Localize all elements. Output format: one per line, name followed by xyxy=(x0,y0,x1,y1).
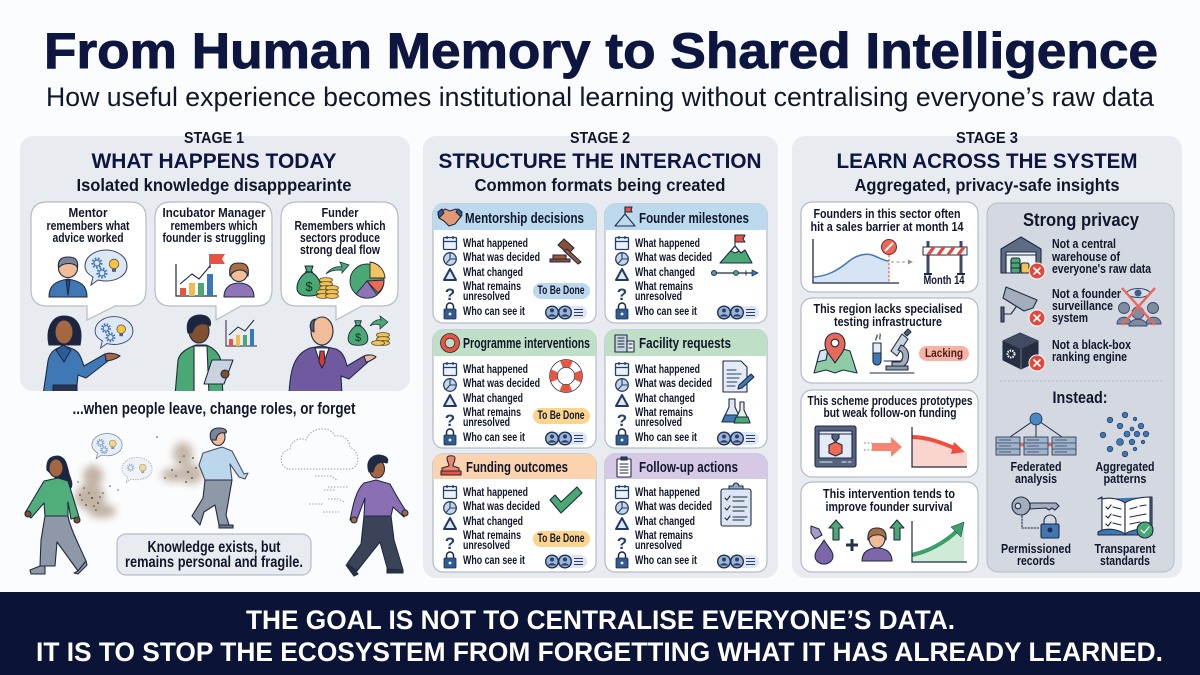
stage 1 subheading: Isolated knowledge disapppearinte xyxy=(76,175,352,195)
card: facility requests: Who can see it xyxy=(635,432,697,444)
card: programme interventions: What was decided xyxy=(463,378,540,390)
stage 3 label: STAGE 3 xyxy=(956,130,1018,147)
icon: rubber stamp xyxy=(441,456,461,475)
status pill: to be done xyxy=(533,283,590,299)
icon: funder money flow xyxy=(348,316,390,345)
speech bubble: incubator manager xyxy=(155,202,272,320)
card: follow-up actions: Who can see it xyxy=(635,555,697,567)
card: programme interventions: What remains xyxy=(463,407,521,419)
icon: mentor with suit xyxy=(49,257,87,297)
icon: plus sign xyxy=(846,539,858,551)
heading: instead: Instead: xyxy=(1052,389,1108,407)
card: follow-up actions: What happened xyxy=(635,487,700,499)
icon: 3d printer xyxy=(815,426,856,467)
icon: large checklist clipboard xyxy=(721,483,751,526)
card: facility requests: unresolved xyxy=(635,417,682,429)
card: facility requests xyxy=(605,330,767,448)
insight card: prototypes weak funding: but weak follow-on funding xyxy=(824,405,957,420)
icon: key and padlock xyxy=(1012,497,1059,538)
card: funding outcomes: ? xyxy=(445,534,455,553)
heading: strong privacy: Strong privacy xyxy=(1023,209,1140,230)
chart: declining funding xyxy=(912,427,967,467)
banner: key message: IT IS TO STOP THE ECOSYSTEM FROM FORGETTING WHAT IT HAS ALREADY LEARNED. xyxy=(36,637,1163,667)
card: facility requests: Facility requests xyxy=(639,336,731,352)
icon: lifebuoy xyxy=(440,334,460,352)
icon: funder money flow: $ xyxy=(355,332,361,344)
card: follow-up actions: unresolved xyxy=(635,540,682,552)
speech bubble: mentor: Mentor xyxy=(68,206,108,220)
card: programme interventions xyxy=(433,330,596,448)
callout: knowledge exists: remains personal and fragile. xyxy=(125,554,303,571)
card: funding outcomes xyxy=(433,454,596,572)
icon: warehouse crossed out xyxy=(1001,237,1041,273)
banner: key message xyxy=(0,592,1200,675)
icon: mountain with flag xyxy=(615,207,635,226)
chart: growth curve stalling xyxy=(813,239,913,283)
card: facility requests: ? xyxy=(617,411,627,430)
stage 3 subheading: Aggregated, privacy-safe insights xyxy=(854,175,1120,195)
person: woman walking away in green xyxy=(25,456,87,574)
banner: key message: THE GOAL IS NOT TO CENTRALISE EVERYONE’S DATA. xyxy=(246,605,955,635)
insight card: founder survival: This intervention tends to xyxy=(823,486,955,501)
icon: thought bubble with gears and bulb xyxy=(85,250,127,285)
chart: rising survival xyxy=(912,521,967,562)
card: mentorship decisions: unresolved xyxy=(463,291,510,303)
text: transparent standards: Transparent xyxy=(1094,541,1156,556)
card: follow-up actions: ? xyxy=(617,534,627,553)
text: aggregated patterns xyxy=(1096,459,1155,486)
icon: surveillance camera xyxy=(1001,287,1037,322)
subtitle: How useful experience becomes institutional learning without centralising everyone’s raw data xyxy=(46,82,1155,112)
person: man walking in purple xyxy=(346,455,408,576)
icon: green mountain summit flag xyxy=(720,235,752,263)
stage 1 heading: WHAT HAPPENS TODAY xyxy=(92,150,336,173)
callout: knowledge exists: Knowledge exists, but xyxy=(148,539,280,556)
icon: map with pin xyxy=(814,333,857,373)
stage 2 subheading: Common formats being created xyxy=(474,175,726,195)
text: federated analysis xyxy=(1010,459,1062,486)
text: not surveillance: surveillance xyxy=(1052,298,1113,313)
text: not a black box xyxy=(1052,337,1132,364)
card: funding outcomes: What happened xyxy=(463,487,528,499)
speech bubble: incubator manager: founder is struggling xyxy=(162,231,266,245)
card: follow-up actions: What changed xyxy=(635,516,695,528)
scene: knowledge dissolving from people walking away xyxy=(25,428,408,576)
card: follow-up actions xyxy=(605,454,767,572)
card: facility requests: What happened xyxy=(635,364,700,376)
person: incubator manager xyxy=(175,315,233,395)
card: facility requests: What changed xyxy=(635,393,695,405)
card: mentorship decisions: What remains xyxy=(463,281,521,293)
stage 2 heading: STRUCTURE THE INTERACTION xyxy=(438,150,762,173)
text: aggregated patterns: patterns xyxy=(1104,471,1146,486)
card: founder milestones: What was decided xyxy=(635,252,712,264)
icon: founder increase xyxy=(862,520,904,561)
card: programme interventions: unresolved xyxy=(463,417,510,429)
insight card: testing infrastructure xyxy=(801,298,978,383)
card: mentorship decisions: What happened xyxy=(463,238,528,250)
icon: arrow to pie chart xyxy=(326,262,385,298)
card: programme interventions: What happened xyxy=(463,364,528,376)
callout: knowledge exists xyxy=(117,534,311,575)
speech bubble: incubator manager: remembers which xyxy=(170,219,258,233)
icon: small checklist clipboard xyxy=(617,457,631,477)
insight card: sales barrier: hit a sales barrier at month 14 xyxy=(810,219,964,234)
dust cloud middle xyxy=(156,436,203,484)
card: founder milestones: unresolved xyxy=(635,291,682,303)
status pill: to be done: To Be Done xyxy=(538,285,584,297)
text: not surveillance xyxy=(1052,286,1121,325)
stage 2 label: STAGE 2 xyxy=(570,130,630,147)
person: mentor woman xyxy=(43,316,120,395)
icon: fading knowledge bubbles xyxy=(92,433,152,483)
icon: green check xyxy=(550,487,582,513)
text: not a black box: Not a black-box xyxy=(1052,337,1132,352)
speech bubble: funder xyxy=(281,202,398,320)
card: facility requests: What was decided xyxy=(635,378,712,390)
card: founder milestones: What happened xyxy=(635,238,700,250)
text: not a black box: ranking engine xyxy=(1052,349,1127,364)
insight card: prototypes weak funding: This scheme produces prototypes xyxy=(808,393,972,408)
card: mentorship decisions: What was decided xyxy=(463,252,540,264)
text: permissioned records: Permissioned xyxy=(1001,541,1071,556)
card: funding outcomes: unresolved xyxy=(463,540,510,552)
text: not surveillance: system xyxy=(1052,310,1088,325)
speech bubble: funder: sectors produce xyxy=(300,231,380,245)
icon: milestone timeline xyxy=(712,270,758,276)
person: funder xyxy=(289,317,376,395)
card: follow-up actions: What was decided xyxy=(635,501,712,513)
icon: handshake xyxy=(438,209,462,226)
panel: stage 1 what happens today xyxy=(20,130,410,395)
card: follow-up actions: Follow-up actions xyxy=(639,460,738,476)
speech bubble: mentor: remembers what xyxy=(46,219,130,233)
icon: black box cube xyxy=(1003,333,1038,369)
badge: camera no xyxy=(1029,310,1045,326)
card: mentorship decisions xyxy=(433,204,596,323)
card: funding outcomes: Funding outcomes xyxy=(466,460,568,476)
icon: document with pen xyxy=(723,361,754,392)
icon: dashed fading cloud xyxy=(281,429,358,512)
insight card: sales barrier xyxy=(801,202,978,292)
speech bubble: funder: Funder xyxy=(322,206,359,220)
text: transparent standards: standards xyxy=(1100,553,1150,568)
speech bubble: funder: strong deal flow xyxy=(300,243,380,257)
card: follow-up actions: What remains xyxy=(635,530,693,542)
text: permissioned records xyxy=(1001,541,1071,568)
status pill: to be done xyxy=(533,531,590,547)
card: mentorship decisions: ? xyxy=(445,285,455,304)
stage 3 heading: LEARN ACROSS THE SYSTEM xyxy=(836,150,1138,173)
text: federated analysis: analysis xyxy=(1015,471,1057,486)
text: not a warehouse: everyone's raw data xyxy=(1052,261,1152,276)
text: transparent standards xyxy=(1094,541,1156,568)
text: when people leave: ...when people leave, change roles, or forget xyxy=(72,399,356,418)
card: founder milestones: Who can see it xyxy=(635,306,697,318)
status pill: lacking: Lacking xyxy=(925,346,963,360)
text: not a warehouse xyxy=(1051,236,1152,276)
panel: stage 2 structure the interaction xyxy=(423,130,778,578)
speech bubble: funder: Remembers which xyxy=(294,219,386,233)
speech bubble: mentor: advice worked xyxy=(52,231,124,245)
panel: stage 3 learn across the system xyxy=(792,130,1182,578)
insight card: testing infrastructure: testing infrastructure xyxy=(834,314,942,329)
icon: money bag and coins: $ xyxy=(305,279,313,294)
status pill: to be done: To Be Done xyxy=(538,410,584,422)
insight card: prototypes weak funding xyxy=(801,390,978,477)
icon: lab flasks xyxy=(722,399,750,423)
icon: test tube and microscope xyxy=(870,329,914,373)
icon: federated network xyxy=(996,413,1076,455)
people: mentor, incubator manager and funder xyxy=(43,315,390,395)
arrow: prototypes to funding xyxy=(864,437,902,457)
icon: road barrier xyxy=(923,241,967,287)
insight card: sales barrier: Founders in this sector often xyxy=(814,206,961,221)
card: funding outcomes: What was decided xyxy=(463,501,540,513)
text: permissioned records: records xyxy=(1017,553,1055,568)
person: man walking away in light blue xyxy=(192,428,248,528)
icon: road barrier: Month 14 xyxy=(924,275,965,287)
card: programme interventions: Programme interventions xyxy=(463,336,590,352)
panel: strong privacy xyxy=(987,203,1174,572)
icon: resources increase xyxy=(811,520,843,564)
card: founder milestones: ? xyxy=(617,285,627,304)
dust cloud left xyxy=(75,465,119,518)
icon: watched people crossed out xyxy=(1117,288,1161,326)
card: programme interventions: ? xyxy=(445,411,455,430)
insight card: founder survival xyxy=(801,482,978,572)
stage 1 label: STAGE 1 xyxy=(184,130,244,147)
speech bubble: incubator manager: Incubator Manager xyxy=(162,206,266,220)
icon: open book with check xyxy=(1098,497,1153,538)
card: founder milestones xyxy=(605,204,767,323)
icon: large lifebuoy xyxy=(554,364,578,388)
card: funding outcomes: What remains xyxy=(463,530,521,542)
badge: black box no xyxy=(1029,355,1045,371)
card: programme interventions: Who can see it xyxy=(463,432,525,444)
icon: building xyxy=(615,335,634,352)
icon: small growth chart xyxy=(226,320,257,346)
card: founder milestones: What remains xyxy=(635,281,693,293)
card: mentorship decisions: Mentorship decisions xyxy=(465,211,584,227)
title: From Human Memory to Shared Intelligence xyxy=(44,23,1158,79)
card: mentorship decisions: Who can see it xyxy=(463,306,525,318)
card: founder milestones: Founder milestones xyxy=(639,211,749,227)
insight card: testing infrastructure: This region lacks specialised xyxy=(814,301,963,316)
text: aggregated patterns: Aggregated xyxy=(1096,459,1155,474)
icon: mentor knowledge bubble xyxy=(95,317,133,348)
text: not a warehouse: Not a central xyxy=(1052,236,1116,251)
card: facility requests: What remains xyxy=(635,407,693,419)
text: federated analysis: Federated xyxy=(1010,459,1062,474)
card: funding outcomes: What changed xyxy=(463,516,523,528)
status pill: to be done: To Be Done xyxy=(538,533,584,545)
speech bubble: mentor xyxy=(31,202,146,320)
badge: warehouse no xyxy=(1029,263,1045,279)
icon: aggregated pattern dots xyxy=(1100,412,1149,457)
text: not surveillance: Not a founder xyxy=(1052,286,1121,301)
text: not a warehouse: warehouse of xyxy=(1051,249,1121,264)
icon: gavel xyxy=(550,239,581,264)
icon: growth chart with flag xyxy=(176,254,225,296)
icon: founder portrait xyxy=(224,263,254,297)
card: mentorship decisions: What changed xyxy=(463,267,523,279)
card: funding outcomes: Who can see it xyxy=(463,555,525,567)
status pill: to be done xyxy=(533,408,590,424)
card: founder milestones: What changed xyxy=(635,267,695,279)
card: programme interventions: What changed xyxy=(463,393,523,405)
insight card: founder survival: improve founder survival xyxy=(826,499,952,514)
